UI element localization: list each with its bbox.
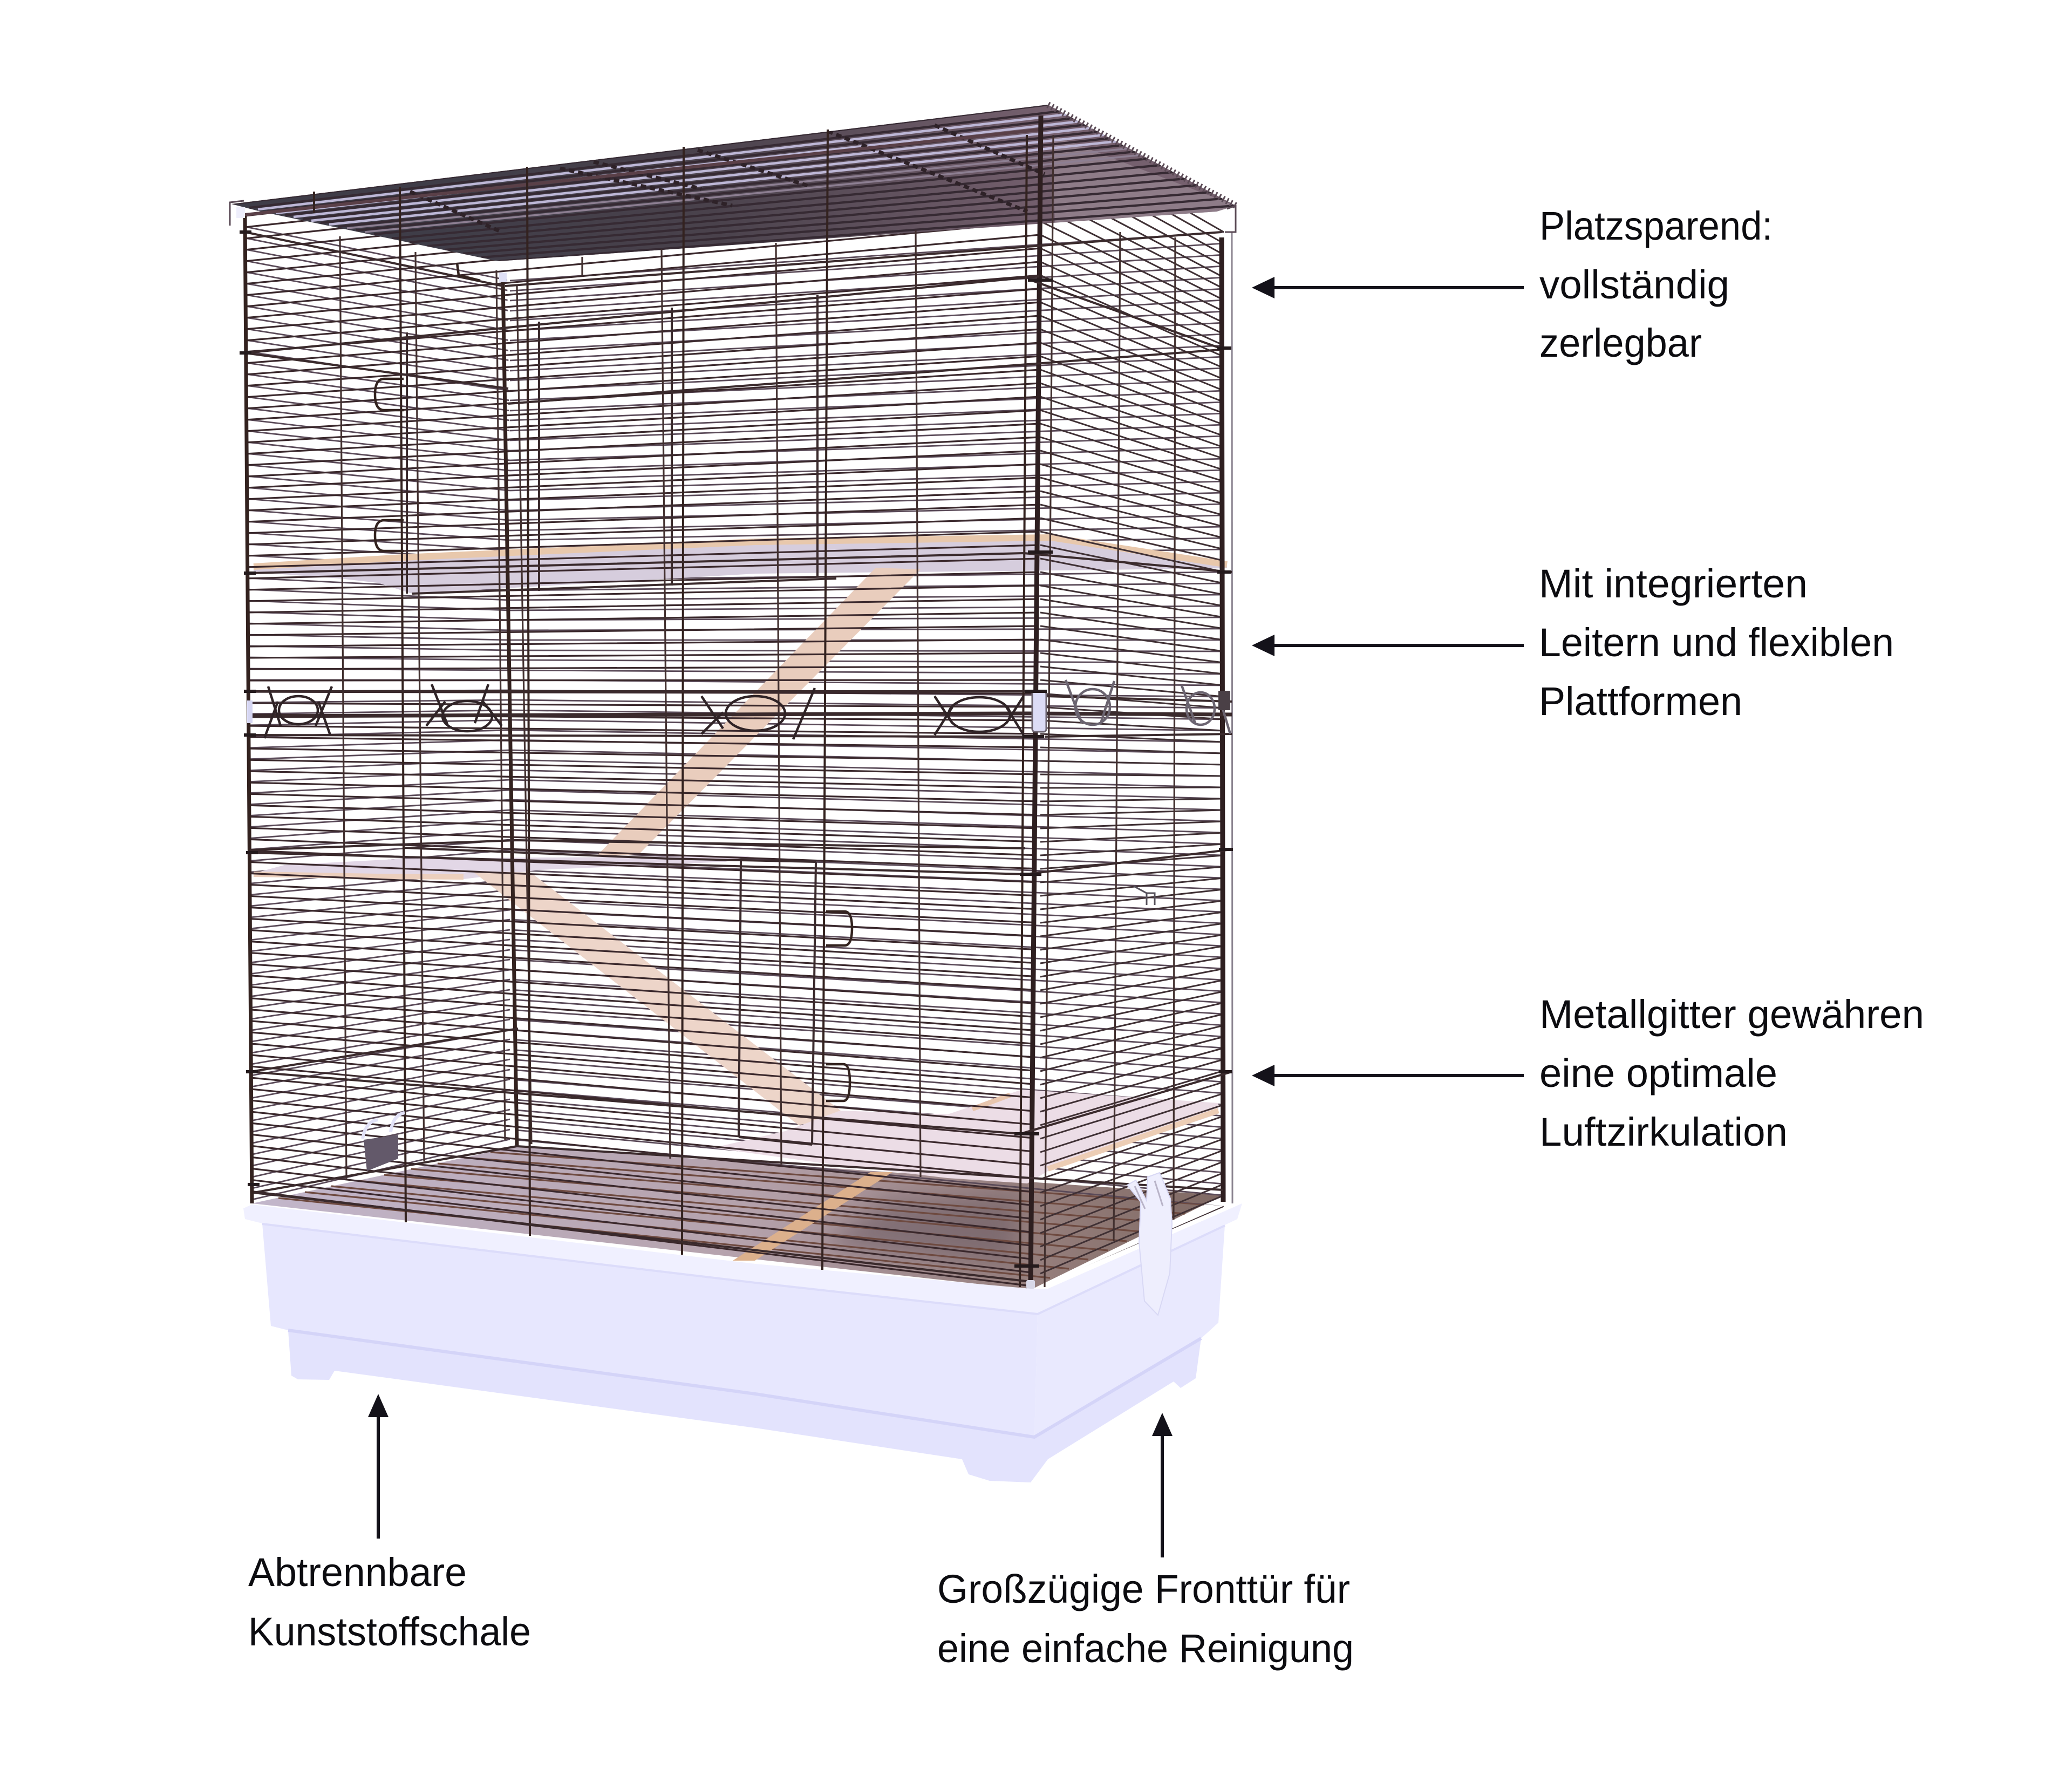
upper ramp xyxy=(596,568,921,856)
cage roof xyxy=(231,105,1236,261)
vertical cage bars xyxy=(245,115,1232,1287)
door hooks xyxy=(375,263,1155,1101)
tray side panel xyxy=(1034,1225,1225,1437)
floor ramp xyxy=(733,1172,892,1261)
tray front panel xyxy=(262,1223,1038,1437)
text: Metallgitter: eine optimale xyxy=(1539,1051,1777,1095)
text: Fronttür: eine einfache Reinigung xyxy=(937,1626,1354,1671)
text: Platzsparend: zerlegbar xyxy=(1539,321,1702,365)
cage rails xyxy=(245,232,1232,1282)
water bottle holder xyxy=(363,1113,405,1171)
text: Kunststoffschale: Kunststoffschale xyxy=(248,1609,531,1654)
arrow: Metallgitter xyxy=(1252,1065,1524,1086)
back-left wall wires xyxy=(245,227,510,1201)
text: Kunststoffschale xyxy=(248,1550,531,1654)
text: Platzsparend: Platzsparend: xyxy=(1539,203,1773,248)
text: Metallgitter: Metallgitter gewähren xyxy=(1539,992,1924,1037)
text: Metallgitter xyxy=(1539,992,1924,1154)
front wall wires xyxy=(245,127,1040,1287)
arrow: Platzsparend xyxy=(1252,277,1524,298)
tray rim xyxy=(243,1203,1242,1314)
arrow: Fronttür xyxy=(1152,1413,1173,1557)
text: Leitern und Plattformen: Mit integrierten xyxy=(1539,561,1808,606)
infographic canvas xyxy=(229,101,1922,1671)
text: Fronttür xyxy=(937,1567,1354,1671)
arrow: Leitern und Plattformen xyxy=(1252,635,1524,656)
text: Leitern und Plattformen: Leitern und flexiblen xyxy=(1539,620,1894,665)
door latch xyxy=(1127,1173,1172,1315)
back-right wall wires xyxy=(510,232,1224,1207)
lower ramp xyxy=(472,871,846,1125)
text: Platzsparend xyxy=(1539,203,1773,365)
text: Kunststoffschale: Abtrennbare xyxy=(248,1550,467,1595)
arrow: Kunststoffschale xyxy=(368,1394,388,1539)
plastic tray xyxy=(243,1203,1242,1482)
middle platform xyxy=(250,856,753,879)
corner connectors and clips xyxy=(230,201,1236,1289)
text: Leitern und Plattformen: Plattformen xyxy=(1539,679,1742,724)
cage floor xyxy=(252,1146,1223,1290)
cage illustration xyxy=(230,105,1242,1482)
text: Metallgitter: Luftzirkulation xyxy=(1539,1110,1788,1154)
right side wall wires xyxy=(1040,127,1224,1287)
text: Leitern und Plattformen xyxy=(1539,561,1894,724)
tray base xyxy=(288,1330,1201,1482)
text: Fronttür: Großzügige Fronttür für xyxy=(937,1567,1350,1611)
platform hoops xyxy=(264,680,1230,739)
text: Platzsparend: vollständig xyxy=(1539,262,1729,307)
upper platform xyxy=(254,535,1227,594)
lower platform xyxy=(713,1090,1218,1183)
